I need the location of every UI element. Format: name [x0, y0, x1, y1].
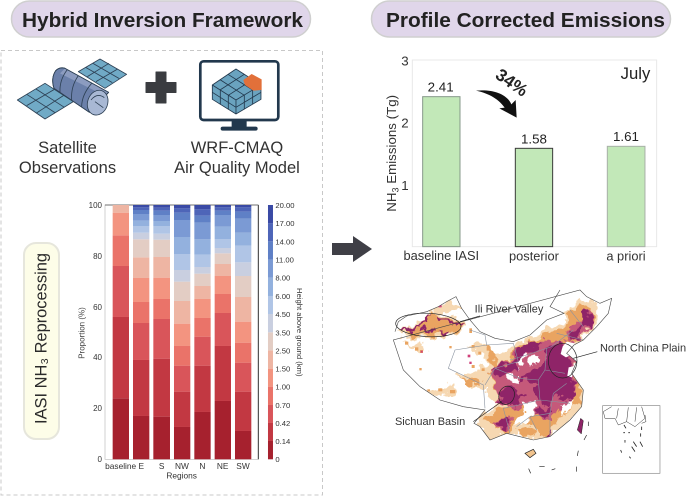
category labels: a priori [606, 249, 646, 264]
panel: hybrid inversion framework dashed box [1, 50, 322, 495]
axes frame [105, 201, 304, 481]
bar: a priori [607, 146, 645, 247]
x axis labels: S [159, 461, 165, 471]
category labels [404, 248, 646, 264]
icon: monitor with model grid cube [200, 61, 278, 131]
y axis title: NH [384, 192, 399, 212]
province boundaries [448, 310, 583, 437]
annotation: Ili River Valley [395, 304, 544, 338]
value labels: 2.41 [428, 80, 454, 95]
heatmap: light emissions [397, 298, 597, 442]
x axis labels: NE [217, 461, 229, 471]
colorbar labels: 14.00 [275, 237, 294, 246]
colorbar labels: 0.42 [275, 419, 290, 428]
arrow: between panels [332, 236, 372, 262]
colorbar [268, 205, 273, 459]
text: WRF-CMAQ Air Quality Model: WRF-CMAQ [191, 139, 283, 157]
text: Satellite Observations: Observations [19, 159, 116, 177]
bar chart: NH3 emissions July [384, 54, 657, 264]
y axis tick labels: 20 [93, 404, 103, 413]
y axis title: Proportion (%) [78, 307, 86, 359]
x axis labels: NW [175, 461, 189, 471]
heading: Profile Corrected Emissions [372, 1, 670, 37]
colorbar title: Height above ground (km) [295, 288, 304, 377]
x axis labels: Regions [166, 471, 197, 481]
annotation: North China Plain: North China Plain [600, 343, 686, 355]
y axis tick labels: 0 [98, 455, 103, 464]
category labels: posterior [509, 249, 560, 264]
x axis labels: E [139, 461, 145, 471]
value labels: 1.61 [613, 129, 639, 144]
label: IASI NH3 Reprocessing: IASI NH₃ Reprocessing [32, 253, 50, 424]
colorbar labels: 2.50 [275, 346, 290, 355]
bar: posterior [515, 148, 553, 247]
South China Sea dashes [529, 422, 588, 473]
colorbar labels: 1.00 [275, 383, 290, 392]
annotation: North China Plain [548, 343, 686, 378]
bar: E [133, 205, 149, 459]
colorbar labels: 1.50 [275, 365, 290, 374]
x axis labels: N [199, 461, 205, 471]
colorbar labels: 4.50 [275, 310, 290, 319]
y axis tick labels: 80 [93, 252, 103, 261]
bar: S [153, 205, 170, 459]
bar: baseline IASI [423, 97, 460, 247]
colorbar labels: 6.00 [275, 292, 290, 301]
label: IASI NH3 Reprocessing [24, 243, 59, 439]
colorbar labels: 0.70 [275, 401, 290, 410]
bar: NE [215, 205, 231, 459]
colorbar labels [275, 201, 294, 464]
colorbar labels: 0 [275, 455, 280, 464]
colorbar labels: 8.00 [275, 274, 290, 283]
annotation: Sichuan Basin: Sichuan Basin [395, 416, 465, 428]
inset: South China Sea [603, 406, 660, 473]
heatmap: moderate emissions [402, 303, 593, 437]
colorbar labels: 0.14 [275, 437, 291, 446]
value labels: 1.58 [521, 131, 547, 146]
colorbar labels: 3.50 [275, 328, 290, 337]
colorbar labels: 17.00 [275, 219, 294, 228]
bar: baseline [113, 205, 129, 459]
heatmap: white gaps [508, 353, 575, 425]
heatmap: scattered cells [405, 328, 491, 393]
value labels [428, 80, 639, 146]
map: China NH3 emissions [393, 290, 686, 473]
heading: Profile Corrected Emissions: Profile Corrected Emissions [386, 9, 665, 32]
y axis title: 3 [391, 187, 401, 192]
July label: July [621, 64, 651, 83]
annotation: Ili River Valley: Ili River Valley [475, 304, 544, 316]
x axis labels [105, 461, 250, 481]
heatmap: high emissions [402, 312, 591, 439]
icon: satellite [17, 59, 127, 119]
axis ticks: 2 [401, 115, 409, 130]
bar: NW [174, 205, 190, 459]
34% label: 34% [492, 64, 532, 101]
y axis tick labels: 40 [93, 353, 103, 362]
y axis title: Emissions (Tg) [384, 95, 399, 187]
text: WRF-CMAQ Air Quality Model: Air Quality Model [174, 159, 300, 177]
x axis labels: SW [236, 461, 250, 471]
x axis labels: baseline [105, 461, 137, 471]
country outline [393, 290, 612, 440]
colorbar labels: 11.00 [275, 256, 294, 265]
heatmap: coastal white seas [561, 342, 575, 377]
curved arrow [476, 90, 517, 118]
colorbar labels: 20.00 [275, 201, 294, 210]
y axis tick labels: 100 [89, 201, 103, 210]
annotation: Sichuan Basin [395, 384, 517, 428]
bar: N [194, 205, 211, 459]
axis ticks [401, 54, 409, 193]
heatmap: strong emissions [490, 310, 593, 432]
heatmap: gridded emissions [397, 298, 597, 442]
y axis tick labels: 60 [93, 303, 103, 312]
axis ticks: 3 [401, 54, 409, 69]
text: Satellite Observations: Satellite [38, 139, 97, 157]
heading: Hybrid Inversion Framework: Hybrid Inversion Framework [22, 9, 304, 32]
stacked bar chart: height profile by region [78, 201, 304, 481]
axis ticks: 1 [401, 178, 409, 193]
category labels: baseline IASI [404, 248, 479, 263]
bar: SW [235, 205, 251, 459]
heading: Hybrid Inversion Framework [12, 1, 310, 37]
islands: Hainan and Taiwan [525, 418, 583, 458]
y axis tick labels [89, 201, 103, 464]
icon: plus sign [146, 72, 176, 103]
